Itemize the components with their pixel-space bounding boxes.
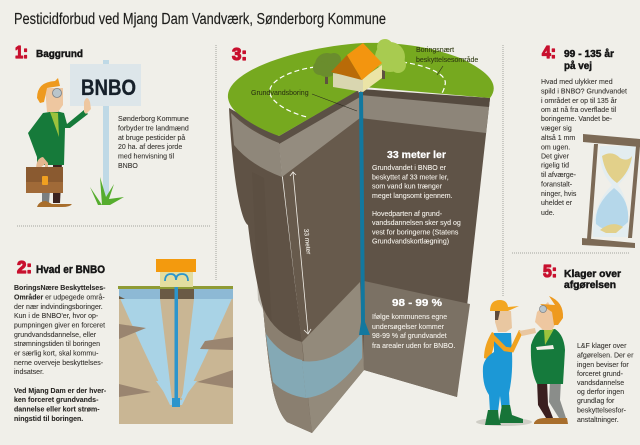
text block: 98-99 %: undersøgelser kommer <box>372 324 445 331</box>
text block: klage: beskyttelsesfor- <box>577 408 627 414</box>
chart: soil cylinder <box>228 43 494 433</box>
left face of wedge <box>279 92 364 433</box>
text block: Baggrund: at bruge pesticider på <box>118 134 185 142</box>
arrow: 33 meter <box>290 172 312 334</box>
text block: hvad med ulykker: ude. <box>541 210 555 217</box>
heading: Klager over afgørelsen <box>564 269 621 291</box>
text block: Baggrund <box>118 116 189 170</box>
text block: Baggrund: BNBO <box>118 163 138 170</box>
text block: BNBO definition: nerne overveje beskyttelses- <box>14 360 104 367</box>
panel: 2 Hvad er BNBO <box>14 257 233 424</box>
icon: BNBO sign <box>70 60 141 198</box>
icon: waterworks building <box>156 259 196 287</box>
icon: light tree <box>375 39 406 79</box>
icon: hourglass <box>582 134 640 248</box>
text block: klage: grundlag for <box>577 398 615 405</box>
panel: 5 Klager over afgørelsen <box>476 261 634 426</box>
text block: 33 meter ler: meget langsomt igennem. <box>372 193 453 200</box>
text block: BNBO definition: Områder er udpegede områ- <box>14 294 105 302</box>
heading: Klager over afgørelsen: Klager over <box>564 269 621 280</box>
number 4: 4: <box>542 42 556 62</box>
text block: hvad med ulykker: rigelig tid <box>541 162 569 170</box>
text block: hvad med ulykker: om ugen. <box>541 144 570 152</box>
label: Grundvandsboring: Grundvandsboring <box>251 90 309 97</box>
title: Pesticidforbud ved Mjang Dam Vandværk, Sønderborg Kommune <box>14 11 386 28</box>
text block: hvad med ulykker: boringerne. Vandet be- <box>541 116 613 123</box>
label: Boringsnært beskyttelsesområde: Boringsnært <box>416 47 454 54</box>
icon: dark tree <box>313 53 341 84</box>
heading: Baggrund: Baggrund <box>36 49 83 60</box>
text block: BNBO definition: der nær indvindingsboringer. <box>14 304 103 311</box>
text block: hvad med ulykker: ninger, hvis <box>541 191 577 198</box>
text block: klage: anstaltninger. <box>577 417 619 424</box>
text block: 33 meter ler: beskyttet af 33 meter ler, <box>372 174 449 182</box>
text block: klage: vandsdannelse <box>577 380 624 387</box>
text block: 98-99 % <box>372 298 455 350</box>
chart: well cross-section <box>118 275 233 424</box>
text block: BNBO definition: dannelse eller kort strøm- <box>14 406 100 414</box>
text block: hvad med ulykker: om at nå fra overflade til <box>541 106 617 114</box>
text block: hvad med ulykker: væger sig <box>541 126 572 132</box>
green surface <box>228 43 494 136</box>
pipe <box>359 92 370 335</box>
heading: 99 - 135 år på vej: 99 - 135 år <box>564 48 614 60</box>
text block: BNBO definition: er særlig kort, skal kommu- <box>14 350 99 358</box>
text block: klage: ingen beviser for <box>577 362 629 369</box>
number 5: 5: <box>543 261 557 281</box>
text block: Baggrund: med henvisning til <box>118 154 174 160</box>
label: Grundvandsboring <box>251 90 357 111</box>
text block: klage: afgørelsen. Der er <box>577 352 634 360</box>
text block: klage: forceret grund- <box>577 371 624 378</box>
text block: BNBO definition: Kun i de BNBO'er, hvor op- <box>14 313 99 320</box>
text block: BNBO definition: indsatser. <box>14 369 44 376</box>
text block: 98-99 %: fra arealer uden for BNBO. <box>372 343 455 350</box>
text block: Baggrund: 20 ha. af deres jorde <box>118 144 182 151</box>
right face of wedge <box>360 90 490 397</box>
panel: 4 99-135 år på vej <box>541 42 640 248</box>
text block: BNBO definition: Ved Mjang Dam er der hver- <box>14 388 107 395</box>
heading: Hvad er BNBO: Hvad er BNBO <box>36 264 105 276</box>
icon: BNBO sign: BNBO <box>81 75 136 100</box>
text block: hvad med ulykker: foranstalt- <box>541 182 573 188</box>
text block: hvad med ulykker: altså 1 mm <box>541 134 575 142</box>
text block: hvad med ulykker: Det giver <box>541 154 570 160</box>
text block: BNBO definition: strømningstiden til boringen <box>14 341 100 348</box>
text block: BNBO definition: pumpningen giver en forceret <box>14 322 105 330</box>
text block: 98-99 %: Ifølge kommunens egne <box>372 314 447 321</box>
text block: BNBO definition: grundvandsdannelse, eller <box>14 332 97 339</box>
number 2: 2: <box>17 257 32 277</box>
text block: 33 meter ler: Grundvandet i BNBO er <box>372 165 447 172</box>
text block: 98-99 %: 98-99 % af grundvandet <box>372 333 447 340</box>
text block: 33 meter ler: 33 meter ler <box>387 150 446 161</box>
text block: 33 meter ler: som vand kun trænger <box>372 184 443 190</box>
panel: 1 Baggrund <box>15 42 189 207</box>
heading: 99 - 135 år på vej <box>564 48 614 72</box>
text block: 98-99 %: 98 - 99 % <box>392 298 442 309</box>
icon: grass <box>90 177 124 205</box>
text block: BNBO definition: BoringsNære Beskyttelses- <box>14 285 106 292</box>
text block: BNBO definition: ningstid til boringen. <box>14 416 83 423</box>
icon: farmer <box>476 300 536 426</box>
text block: BNBO definition <box>14 285 107 423</box>
text block: klage <box>577 343 634 424</box>
text block: Baggrund: forbyder tre landmænd <box>118 126 189 132</box>
label: Boringsnært beskyttelsesområde <box>416 47 478 75</box>
text block: hvad med ulykker <box>541 79 627 217</box>
number 3: 3: <box>232 44 247 64</box>
panel: 3 cylinder diagram <box>228 39 494 433</box>
text block: 33 meter ler: Hovedparten af grund- <box>372 211 443 218</box>
icon: house <box>331 43 382 92</box>
number 1: 1: <box>15 42 28 62</box>
text block: BNBO definition: ken forceret grundvands- <box>14 397 99 404</box>
heading: 99 - 135 år på vej: på vej <box>564 60 592 72</box>
icon: man with briefcase <box>26 78 91 207</box>
text block: hvad med ulykker: til afværge- <box>541 172 577 179</box>
arrow: 33 meter: 33 meter <box>302 228 312 256</box>
text block: hvad med ulykker: spild i BNBO? Grundvandet <box>541 88 627 96</box>
text block: 33 meter ler: Grundvandskortlægning) <box>372 238 449 246</box>
text block: hvad med ulykker: i området er op til 135 år <box>541 97 618 105</box>
text block: hvad med ulykker: uheldet er <box>541 200 573 207</box>
text block: klage: og derfor ingen <box>577 389 624 396</box>
text block: 33 meter ler: vandsdannelsen sker syd og <box>372 220 461 227</box>
text block: hvad med ulykker: Hvad med ulykker med <box>541 79 613 86</box>
label: Boringsnært beskyttelsesområde: beskyttelsesområde <box>416 56 478 64</box>
text block: 33 meter ler: vest for boringerne (Statens <box>372 230 459 236</box>
heading: Klager over afgørelsen: afgørelsen <box>564 280 616 291</box>
text block: Baggrund: Sønderborg Kommune <box>118 116 189 123</box>
text block: klage: L&F klager over <box>577 343 627 350</box>
curved outer face <box>229 108 312 433</box>
text block: 33 meter ler <box>372 150 461 246</box>
icon: official in green jacket <box>531 296 568 424</box>
